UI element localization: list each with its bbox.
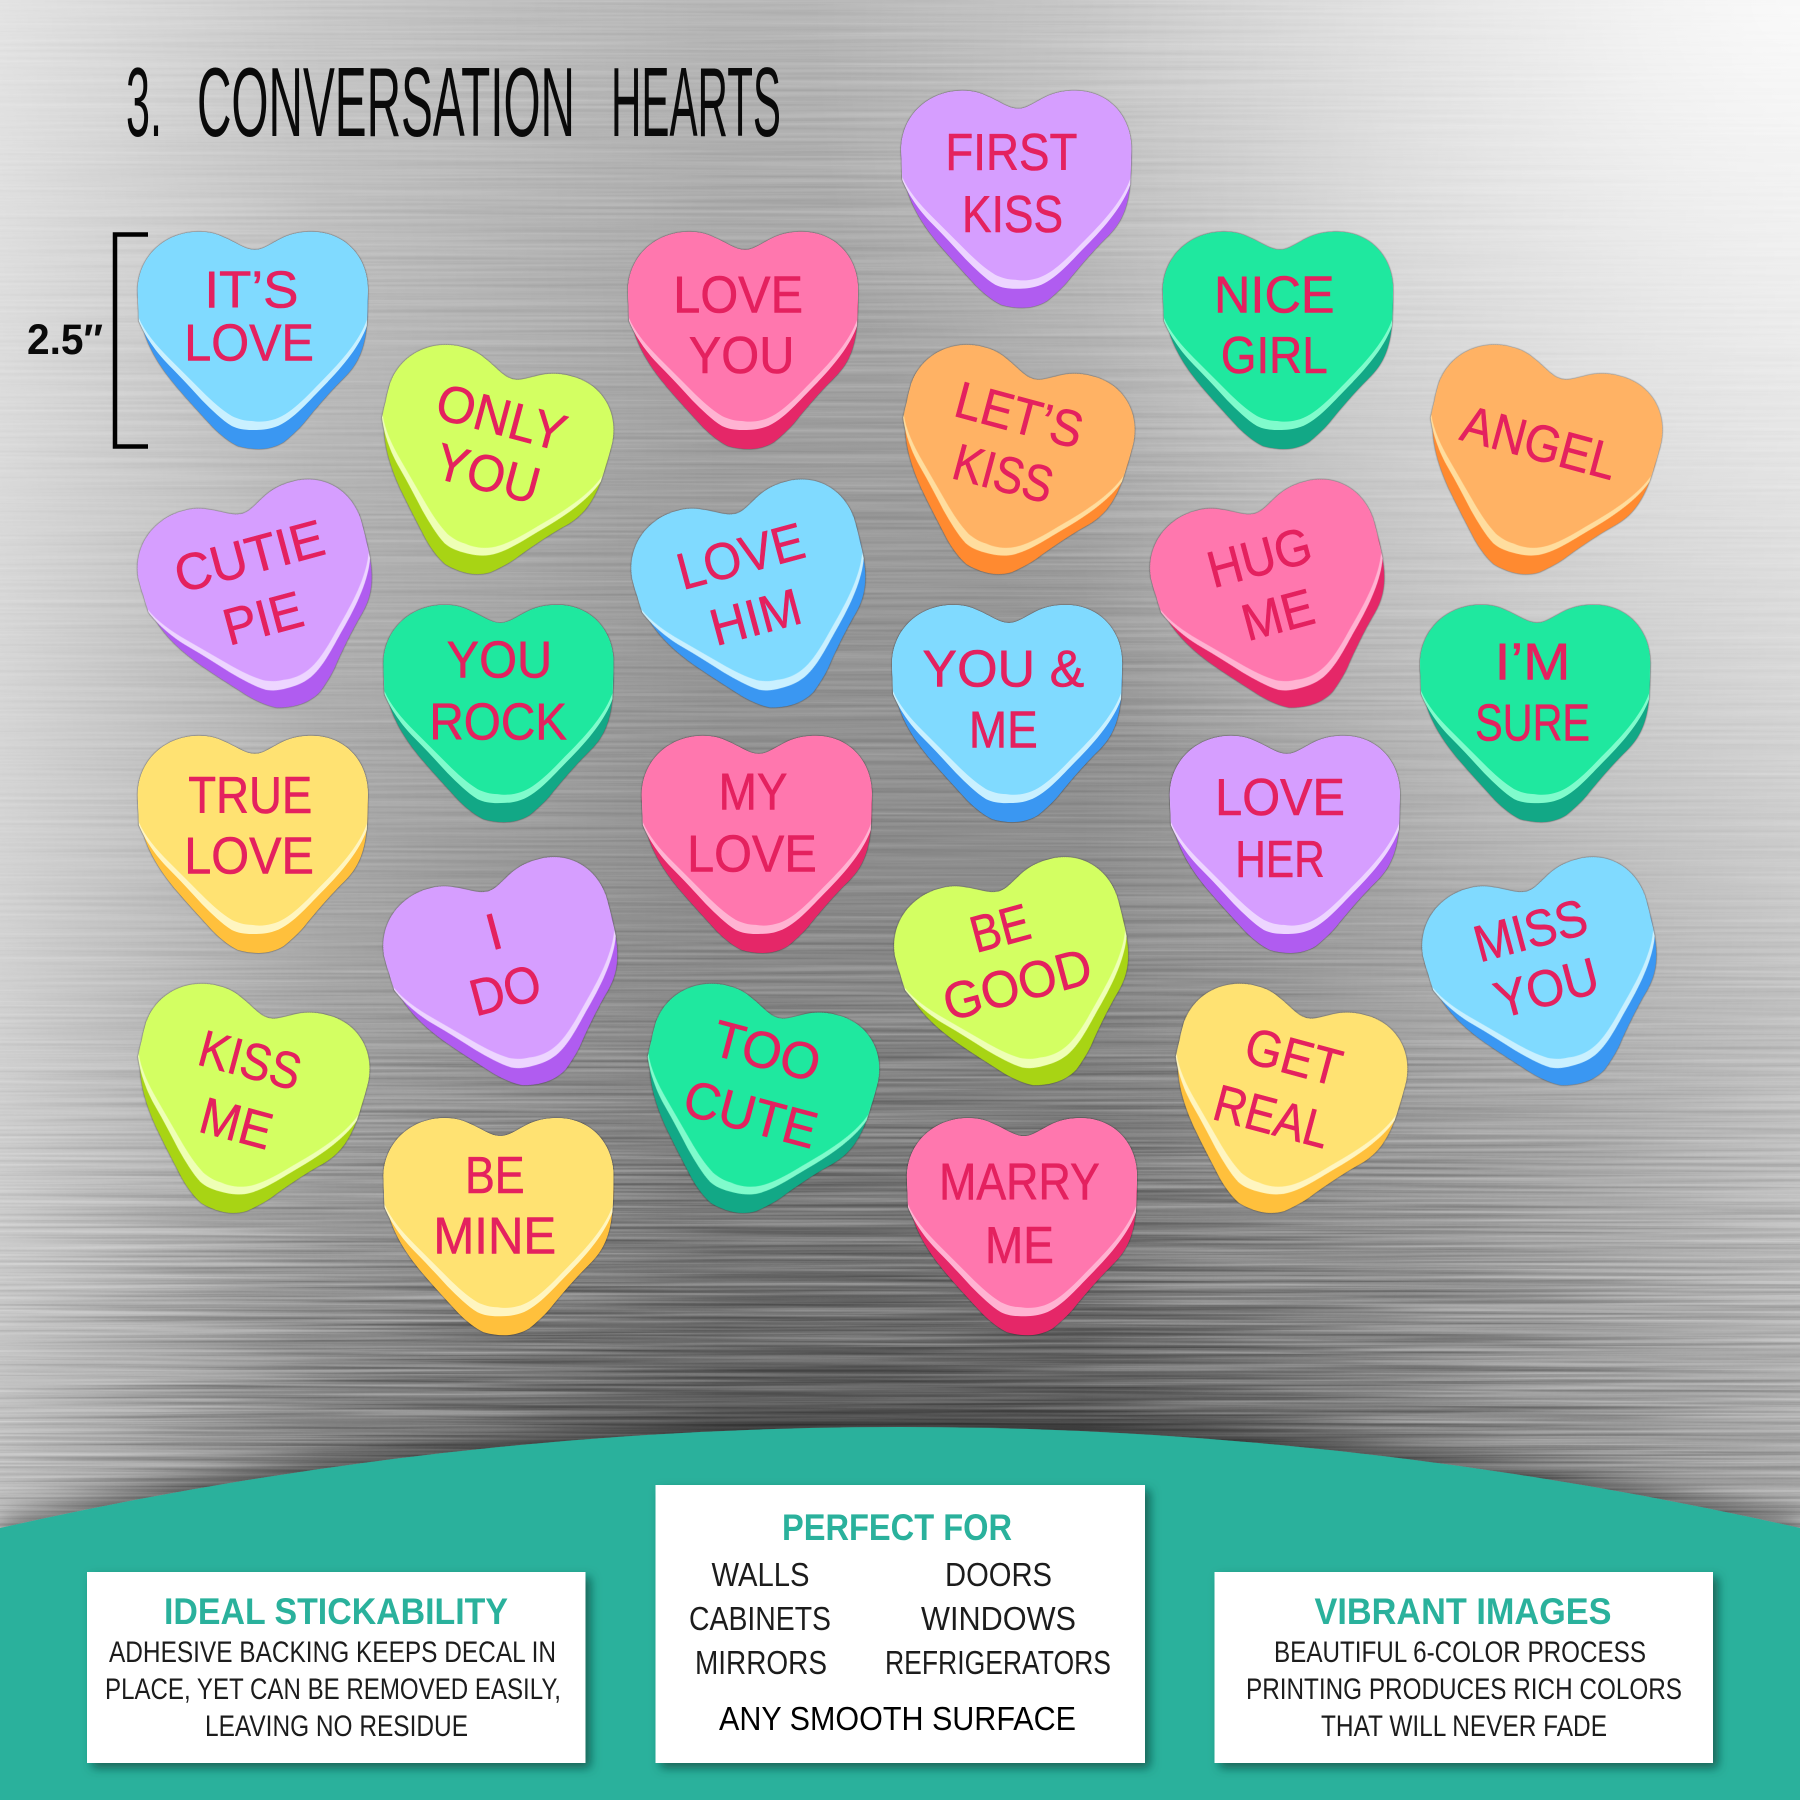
heart: MY LOVE: MY xyxy=(719,762,788,820)
heart: IT'S LOVE xyxy=(138,232,368,449)
heart: I'M SURE: I’M xyxy=(1495,633,1570,691)
panel: vibrant images: PRINTING PRODUCES RICH COLORS xyxy=(1246,1673,1682,1706)
text: HEARTS xyxy=(611,47,781,157)
heart: ONLY YOU: YOU xyxy=(429,432,546,515)
panel: perfect for: DOORS xyxy=(945,1556,1052,1593)
heart: I DO xyxy=(370,845,649,1114)
heart: BE GOOD: BE xyxy=(964,892,1036,964)
panel: vibrant images: VIBRANT IMAGES xyxy=(1314,1591,1612,1632)
heart: MISS YOU: YOU xyxy=(1488,946,1605,1029)
size bracket: 2.5 inches: 2.5″ xyxy=(27,316,103,364)
panel: ideal stickability: ADHESIVE BACKING KEEPS DECAL IN xyxy=(109,1636,556,1669)
heart: LOVE YOU: YOU xyxy=(689,326,794,384)
heart: FIRST KISS: KISS xyxy=(962,185,1063,243)
panel: perfect for: PERFECT FOR xyxy=(782,1507,1012,1548)
heart: MY LOVE xyxy=(642,736,872,953)
panel: ideal stickability: LEAVING NO RESIDUE xyxy=(205,1710,468,1743)
heart: TRUE LOVE: LOVE xyxy=(184,827,314,885)
panel: ideal stickability: IDEAL STICKABILITY xyxy=(164,1591,508,1632)
heart: LOVE HER xyxy=(1170,736,1400,953)
heart: KISS ME: KISS xyxy=(193,1019,308,1101)
panel: vibrant images: BEAUTIFUL 6-COLOR PROCESS xyxy=(1274,1636,1646,1669)
heart: HUG ME: HUG xyxy=(1201,515,1318,599)
heart: LOVE YOU: LOVE xyxy=(673,265,803,323)
heart: CUTIE PIE: PIE xyxy=(217,580,309,656)
heart: HUG ME: ME xyxy=(1235,577,1320,652)
heart: MARRY ME: ME xyxy=(985,1216,1054,1274)
panel: perfect for: MIRRORS xyxy=(695,1644,827,1681)
heart: NICE GIRL: NICE xyxy=(1214,265,1335,323)
heart: LOVE HIM: HIM xyxy=(704,577,807,657)
heart: TOO CUTE: CUTE xyxy=(678,1068,824,1159)
heart: BE GOOD xyxy=(881,845,1159,1114)
heart: ANGEL: ANGEL xyxy=(1455,394,1623,491)
panel: perfect for: REFRIGERATORS xyxy=(885,1644,1111,1681)
heart: IT'S LOVE: LOVE xyxy=(184,313,314,371)
teal curved footer band xyxy=(0,1427,1800,1800)
heart: YOU & ME: ME xyxy=(969,700,1038,758)
heart: BE MINE: MINE xyxy=(433,1207,556,1265)
heart: NICE GIRL xyxy=(1163,232,1393,449)
heart: LOVE HIM: LOVE xyxy=(670,511,811,601)
heart: LET'S KISS xyxy=(869,331,1147,601)
heart: YOU ROCK xyxy=(383,605,614,822)
panel: vibrant images: THAT WILL NEVER FADE xyxy=(1321,1710,1607,1743)
heart: HUG ME xyxy=(1137,467,1415,736)
heart: I'M SURE xyxy=(1420,605,1650,822)
heart: MY LOVE: LOVE xyxy=(687,824,817,882)
panel: perfect for: CABINETS xyxy=(689,1600,831,1637)
heart: YOU & ME: YOU & xyxy=(922,640,1084,698)
heart: IT'S LOVE: IT’S xyxy=(204,261,298,319)
heart: YOU & ME xyxy=(892,605,1122,822)
heart: BE GOOD: GOOD xyxy=(937,937,1098,1032)
panel: perfect for xyxy=(656,1485,1145,1763)
heart: LOVE HER: HER xyxy=(1235,830,1325,888)
heart: ANGEL xyxy=(1396,331,1675,601)
heart: ONLY YOU xyxy=(348,331,626,601)
heart: TRUE LOVE xyxy=(138,736,368,953)
heart: NICE GIRL: GIRL xyxy=(1221,326,1328,384)
hearts xyxy=(104,91,1688,1335)
heart: MISS YOU xyxy=(1409,845,1688,1114)
panel: perfect for: WINDOWS xyxy=(921,1600,1076,1637)
heart: CUTIE PIE xyxy=(125,467,403,736)
heart: YOU ROCK: ROCK xyxy=(429,692,567,750)
heart: LOVE HIM xyxy=(618,467,897,736)
panel: perfect for: WALLS xyxy=(712,1556,810,1593)
heart: LOVE HER: LOVE xyxy=(1215,768,1345,826)
panel: perfect for: ANY SMOOTH SURFACE xyxy=(719,1700,1076,1737)
heart: I DO: DO xyxy=(463,953,547,1027)
heart: FIRST KISS xyxy=(901,91,1131,308)
heart: LET'S KISS: LET’S xyxy=(949,370,1089,460)
heart: BE MINE xyxy=(383,1118,614,1335)
panel: ideal stickability: PLACE, YET CAN BE REMOVED EASILY, xyxy=(105,1673,561,1706)
heart: KISS ME: ME xyxy=(194,1086,279,1160)
heart: LET'S KISS: KISS xyxy=(947,432,1060,514)
heart: FIRST KISS: FIRST xyxy=(945,123,1077,181)
panel: ideal stickability xyxy=(87,1572,586,1763)
title: 3. xyxy=(126,47,162,157)
heart: MARRY ME xyxy=(907,1118,1137,1335)
heart: LOVE YOU xyxy=(628,232,858,449)
heart: TOO CUTE xyxy=(614,970,892,1240)
heart: I'M SURE: SURE xyxy=(1475,693,1590,751)
title: CONVERSATION xyxy=(197,47,575,157)
heart: GET REAL: REAL xyxy=(1208,1073,1336,1159)
heart: CUTIE PIE: CUTIE xyxy=(168,508,330,604)
heart: GET REAL xyxy=(1142,970,1420,1240)
heart: KISS ME xyxy=(104,970,382,1240)
heart: TRUE LOVE: TRUE xyxy=(188,766,312,824)
heart: MISS YOU: MISS xyxy=(1467,887,1593,973)
heart: YOU ROCK: YOU xyxy=(447,630,552,688)
size bracket: 2.5 inches xyxy=(27,234,148,446)
panel: vibrant images xyxy=(1214,1572,1713,1763)
heart: ONLY YOU: ONLY xyxy=(430,372,573,462)
title xyxy=(126,47,781,157)
heart: BE MINE: BE xyxy=(465,1146,525,1204)
heart: TOO CUTE: TOO xyxy=(707,1009,827,1093)
heart: GET REAL: GET xyxy=(1239,1016,1348,1097)
heart: I DO: I xyxy=(479,902,508,961)
heart: MARRY ME: MARRY xyxy=(939,1153,1100,1211)
